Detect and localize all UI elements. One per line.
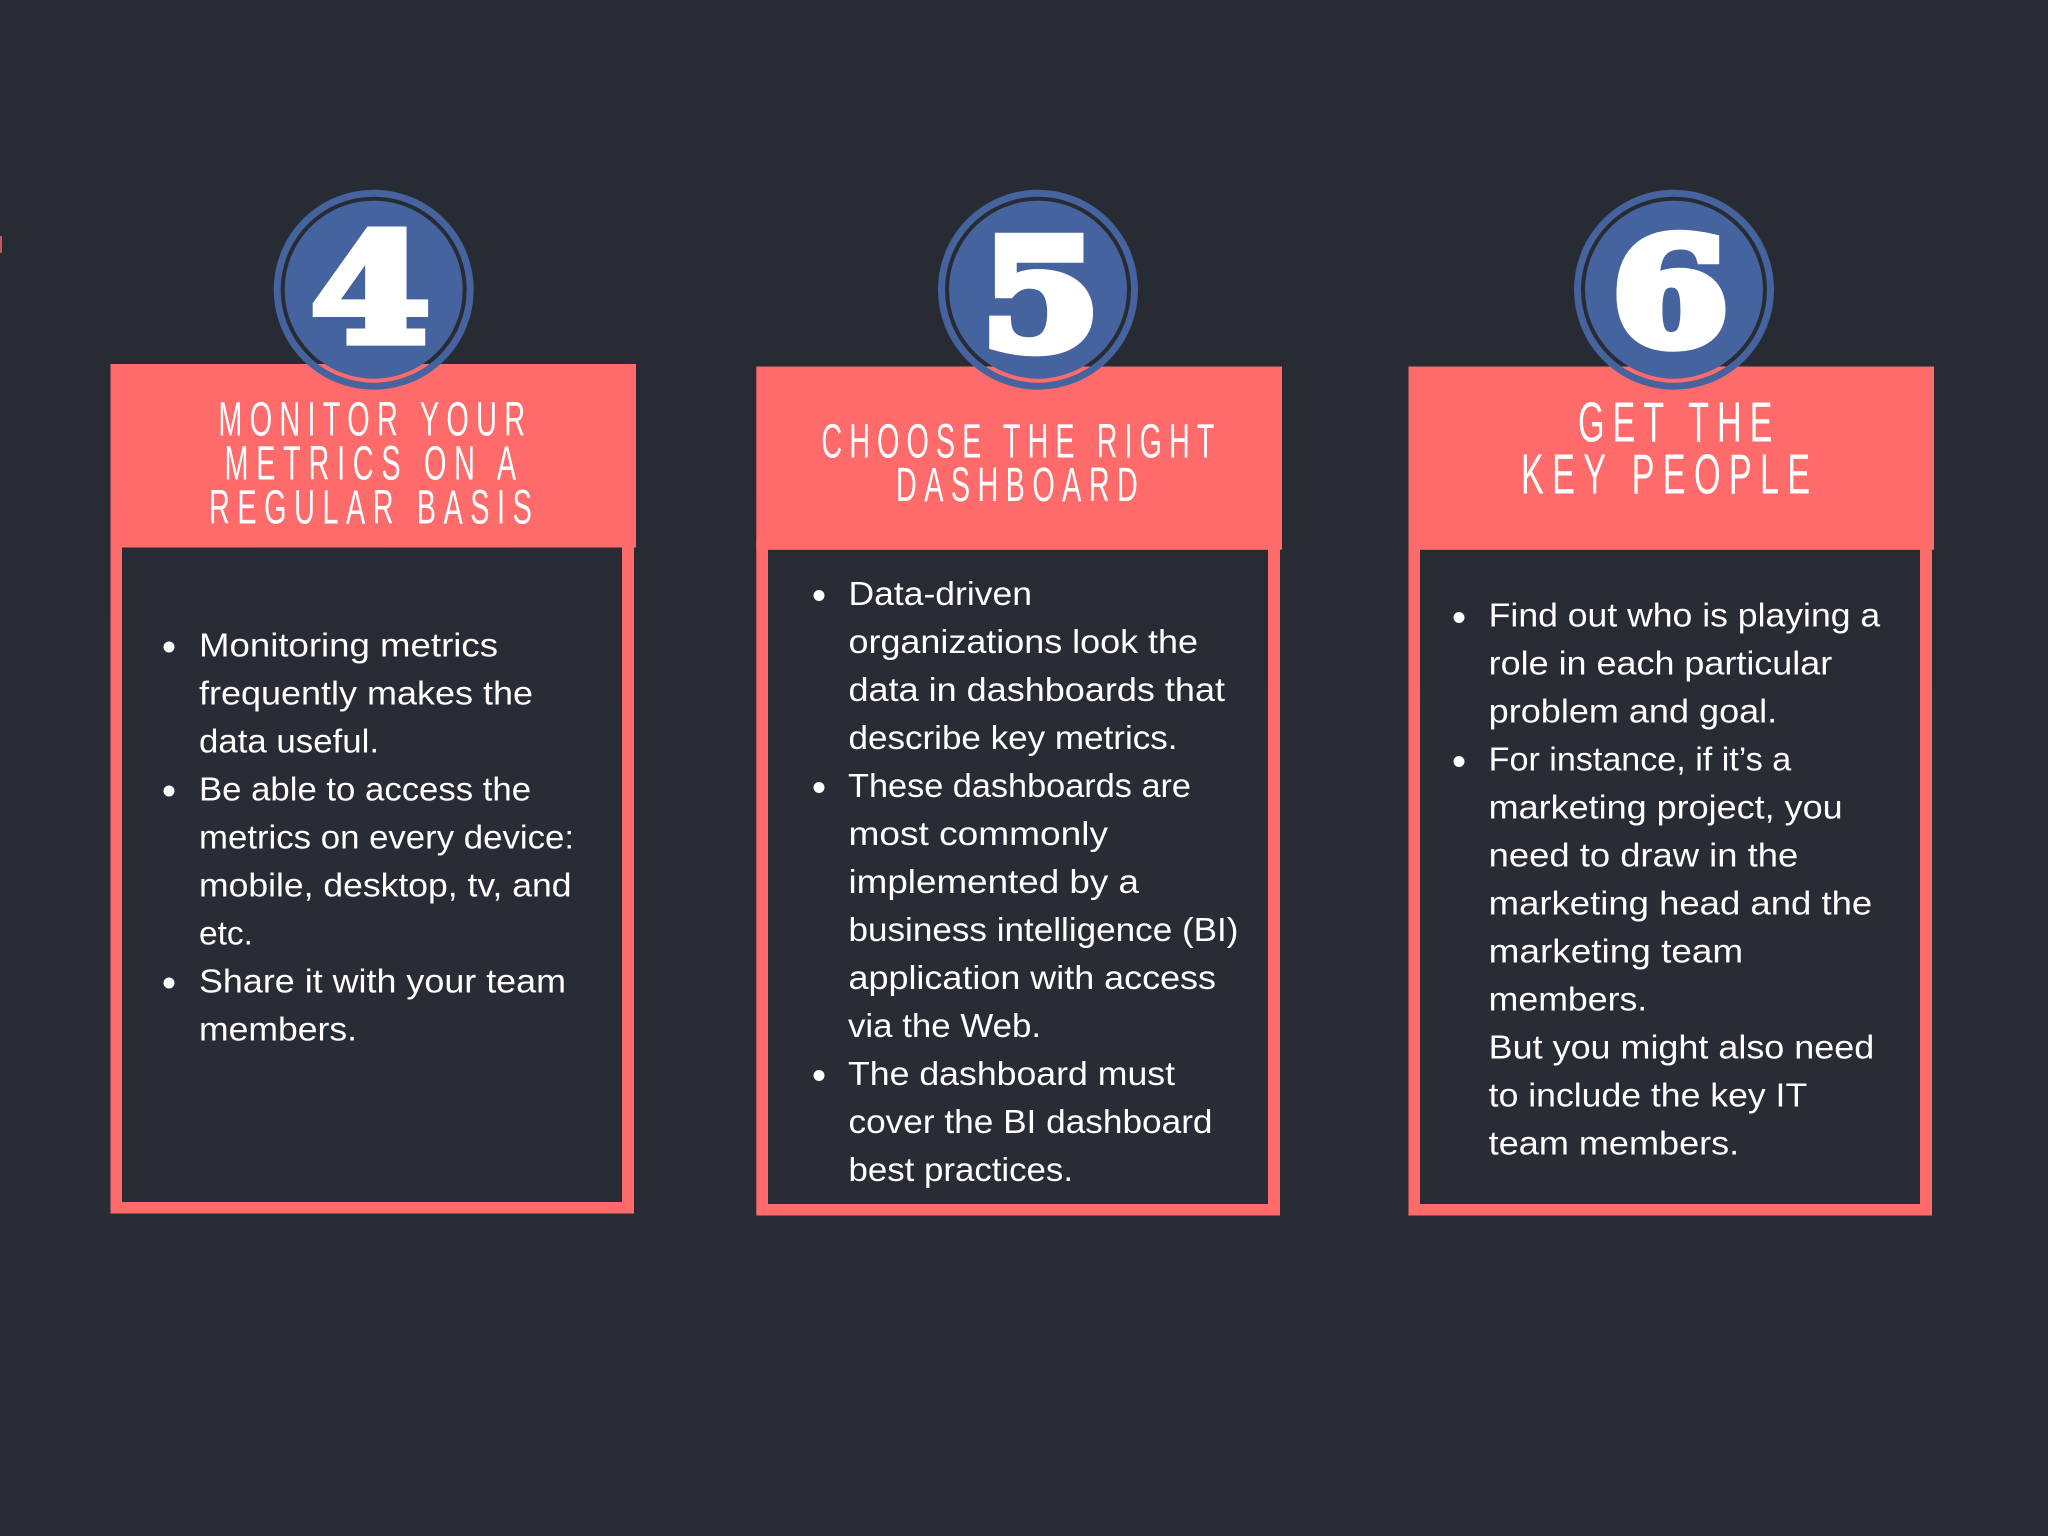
badge: number 6: 6 [1612, 207, 1728, 379]
bullet list: The dashboard must [848, 1055, 1175, 1092]
bullet list [1454, 596, 1881, 1161]
bullet list: need to draw in the [1489, 836, 1798, 873]
heading bar: REGULAR BASIS [209, 481, 532, 534]
heading bar: KEY PEOPLE [1521, 441, 1810, 505]
bullet list: frequently makes the [199, 675, 533, 712]
bullet list: marketing head and the [1489, 884, 1872, 921]
badge: number 6 [1578, 193, 1770, 386]
bullet list: These dashboards are [848, 767, 1191, 804]
badge: number 4: 4 [310, 202, 430, 378]
panel frame [1408, 540, 1932, 1216]
bullet list [164, 627, 574, 1048]
bullet list: Share it with your team [199, 963, 566, 1000]
bullet list: For instance, if it’s a [1489, 740, 1792, 777]
heading bar: GET THE [1578, 390, 1772, 454]
panel: step 4 monitor your metrics [110, 193, 636, 1214]
badge: number 4 [277, 193, 470, 386]
panel frame [110, 540, 634, 1214]
badge: number 5 [942, 193, 1134, 386]
bullet list: Find out who is playing a [1489, 596, 1881, 633]
heading bar: MONITOR YOUR [218, 393, 525, 447]
bullet list: via the Web. [848, 1007, 1041, 1044]
heading bar: DASHBOARD [896, 459, 1138, 512]
bullet list: metrics on every device: [199, 819, 574, 856]
bullet list: marketing project, you [1489, 788, 1843, 825]
bullet list: Be able to access the [199, 771, 531, 808]
heading bar [756, 366, 1282, 550]
bullet list: role in each particular [1489, 644, 1832, 681]
bullet list: team members. [1489, 1124, 1739, 1161]
bullet list: members. [199, 1011, 357, 1048]
badge: number 5: 5 [981, 207, 1100, 386]
heading bar: METRICS ON A [224, 437, 517, 490]
bullet list: members. [1489, 980, 1647, 1017]
bullet list: organizations look the [848, 623, 1198, 660]
bullet list: Data-driven [848, 575, 1032, 612]
heading bar: CHOOSE THE RIGHT [821, 415, 1214, 468]
bullet list: application with access [848, 959, 1216, 996]
bullet list: describe key metrics. [848, 719, 1178, 756]
bullet list: mobile, desktop, tv, and [199, 867, 572, 904]
bullet list [814, 575, 1238, 1188]
bullet list: data useful. [199, 723, 379, 760]
bullet list: to include the key IT [1489, 1076, 1807, 1113]
bullet list: best practices. [848, 1151, 1073, 1188]
bullet list: etc. [199, 915, 253, 952]
heading bar [1408, 366, 1934, 550]
bullet list: But you might also need [1489, 1028, 1874, 1065]
heading bar [110, 364, 636, 548]
bullet list: Monitoring metrics [199, 627, 498, 664]
panel: step 6 get the key people [1408, 193, 1934, 1216]
bullet list: data in dashboards that [848, 671, 1225, 708]
bullet list: cover the BI dashboard [848, 1103, 1212, 1140]
panel: step 5 choose the right dashboard [756, 193, 1282, 1216]
bullet list: implemented by a [848, 863, 1140, 900]
bullet list: business intelligence (BI) [848, 911, 1238, 948]
bullet list: marketing team [1489, 932, 1743, 969]
panel frame [756, 540, 1280, 1216]
bullet list: problem and goal. [1489, 692, 1777, 729]
bullet list: most commonly [848, 815, 1109, 852]
